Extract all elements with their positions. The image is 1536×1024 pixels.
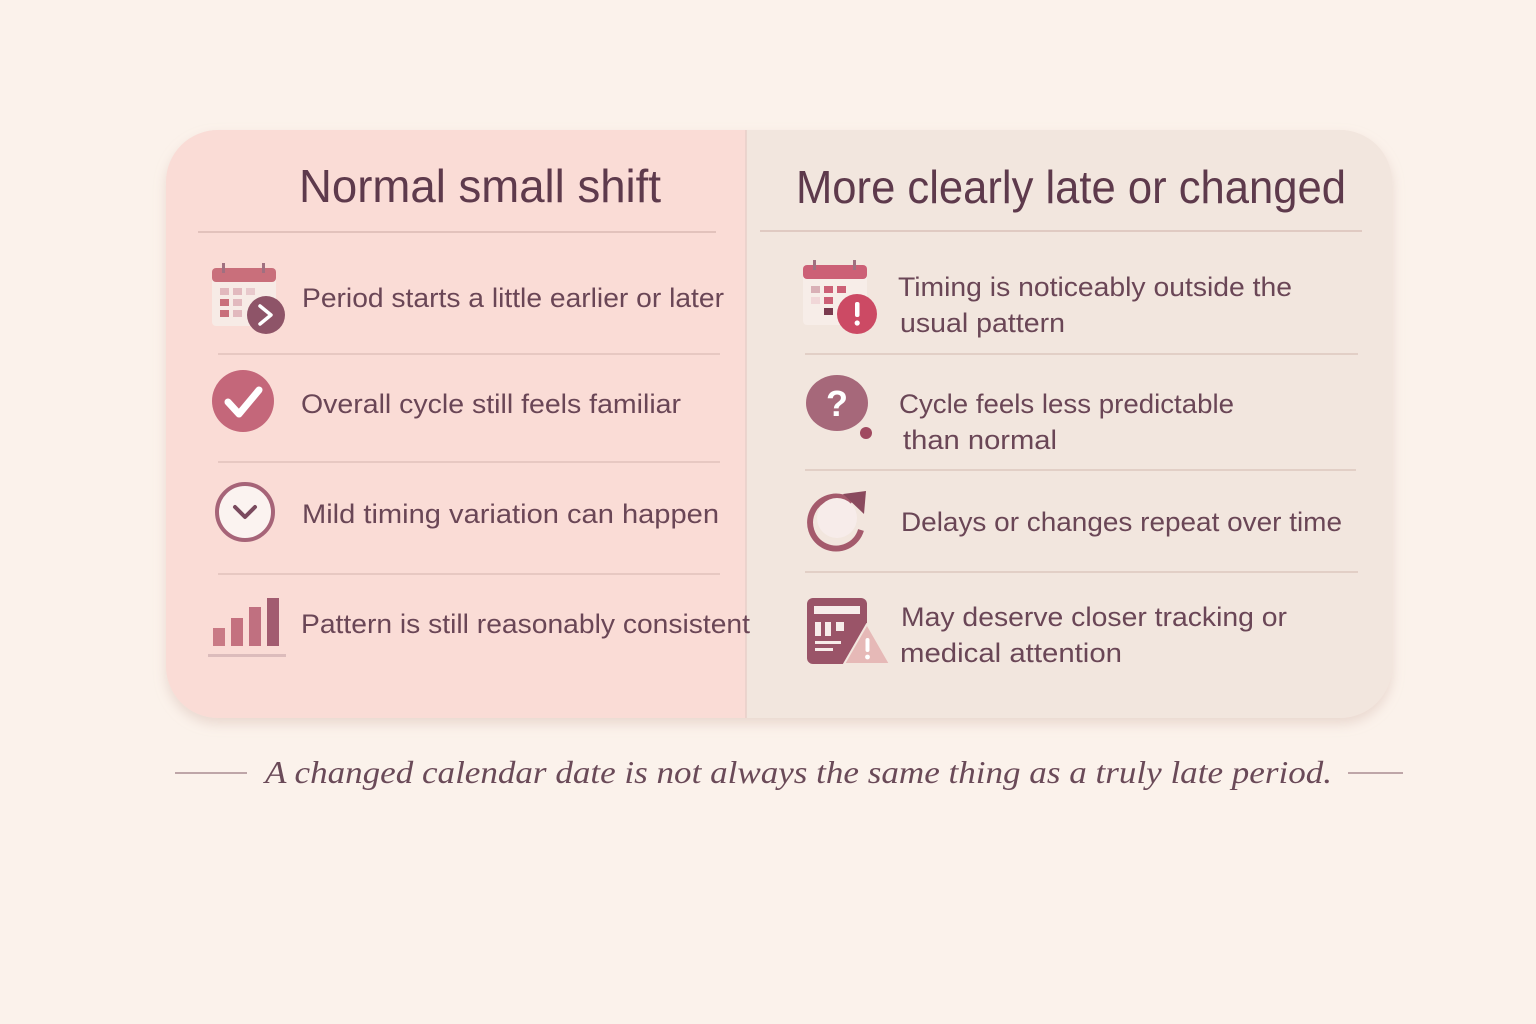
icon: question bubble: ? xyxy=(826,383,848,424)
icon: chart with warning xyxy=(807,598,890,664)
icon: clock xyxy=(217,484,273,540)
text: timing outside: Timing is noticeably outside the xyxy=(898,272,1292,302)
panel: more clearly late or changed xyxy=(760,161,1362,668)
panel: normal small shift background xyxy=(166,130,746,718)
panel: more clearly late or changed: than normal xyxy=(903,425,1057,455)
icon: bar chart xyxy=(208,598,286,657)
icon: calendar with arrow xyxy=(212,263,285,334)
text: mild timing: Mild timing variation can happen xyxy=(302,499,719,529)
heading: normal small shift: Normal small shift xyxy=(299,160,661,212)
card xyxy=(166,130,1392,718)
text: closer tracking: May deserve closer tracking or xyxy=(901,602,1287,632)
footnote: A changed calendar date is not always the same thing as a truly late period. xyxy=(263,754,1332,790)
icon: question bubble xyxy=(806,375,872,439)
text: pattern consistent: Pattern is still reasonably consistent xyxy=(301,609,751,639)
panel: normal small shift xyxy=(198,160,751,657)
icon: calendar with alert xyxy=(803,260,877,334)
panel: more clearly late or changed: medical attention xyxy=(900,638,1122,668)
panel: clearly late background xyxy=(746,130,1392,718)
text: period starts: Period starts a little earlier or later xyxy=(302,283,724,313)
heading: more clearly late: More clearly late or changed xyxy=(796,161,1346,213)
icon: check xyxy=(212,370,274,432)
panel: more clearly late or changed: usual pattern xyxy=(900,308,1065,338)
text: cycle less predictable: Cycle feels less predictable xyxy=(899,389,1234,419)
text: delays repeat: Delays or changes repeat over time xyxy=(901,507,1342,537)
icon: repeat arrow xyxy=(810,491,866,549)
text: overall cycle: Overall cycle still feels familiar xyxy=(301,389,681,419)
